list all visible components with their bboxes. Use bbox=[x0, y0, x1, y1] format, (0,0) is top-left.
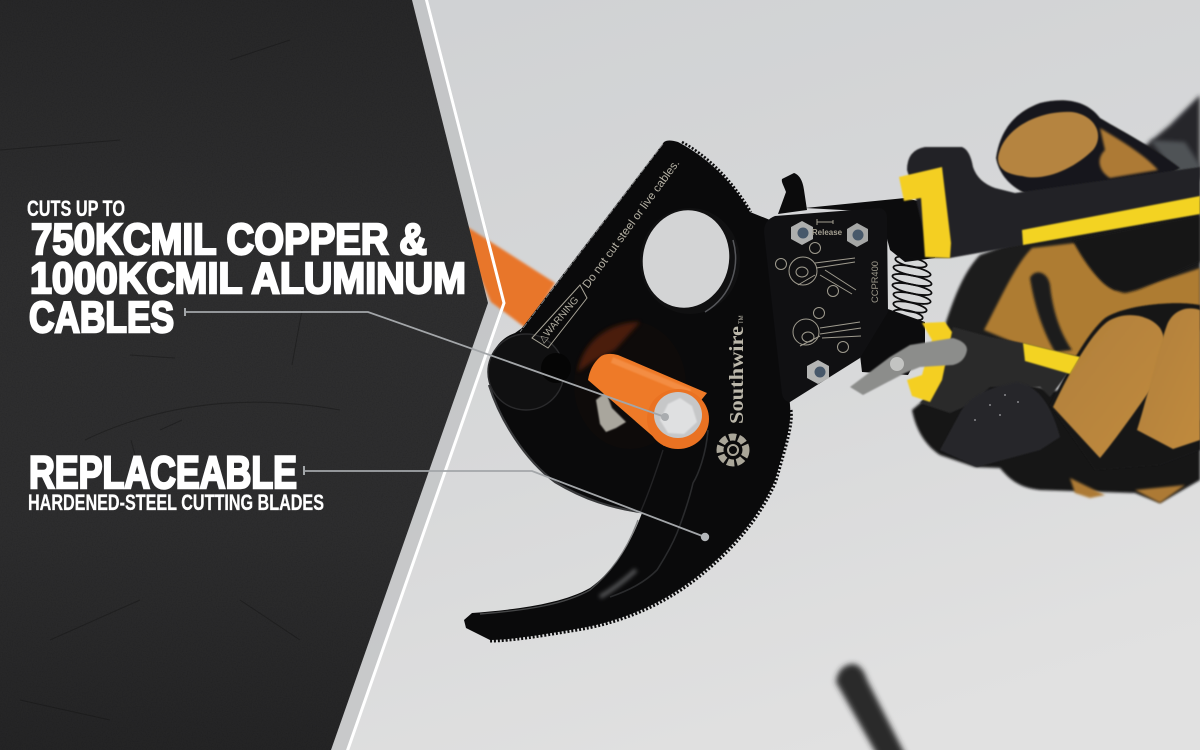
sleeve band bbox=[1150, 140, 1200, 180]
cut debris bbox=[596, 392, 626, 432]
warning box bbox=[532, 285, 587, 348]
warning text: △WARNING bbox=[537, 295, 581, 345]
bolt 2 bbox=[847, 223, 868, 247]
pivot screw bbox=[541, 353, 571, 383]
text block: cutting capacity bbox=[27, 196, 466, 342]
tan finger two bbox=[1137, 308, 1200, 449]
knuckle speckles bbox=[974, 394, 1019, 421]
capacity headline line 1: 750KCMIL COPPER & bbox=[31, 215, 427, 264]
instruction diagrams bbox=[776, 242, 861, 352]
brand logo bbox=[720, 437, 746, 463]
text block: replaceable blades bbox=[28, 447, 324, 515]
trademark: TM bbox=[739, 315, 745, 324]
blade disc tint bbox=[578, 322, 640, 372]
serrated teeth, lower bbox=[490, 410, 791, 641]
panel grain bbox=[0, 0, 488, 750]
palm dark back bbox=[930, 200, 1200, 400]
bolt 1 bbox=[791, 221, 813, 245]
blades subline: HARDENED-STEEL CUTTING BLADES bbox=[28, 490, 324, 515]
panel: dark textured background bbox=[0, 0, 488, 750]
brand name: Southwire bbox=[726, 326, 748, 424]
tan finger one bbox=[1053, 315, 1165, 458]
upper handle bbox=[907, 147, 1200, 258]
upper arm bbox=[805, 198, 935, 262]
cutter body bbox=[464, 140, 790, 640]
lower handle bbox=[920, 327, 1080, 413]
lower tan sliver bbox=[1070, 478, 1185, 503]
lower yellow clip bbox=[907, 322, 952, 402]
panel scratches bbox=[0, 40, 340, 720]
straight edge highlight bbox=[520, 144, 663, 332]
sleeve bbox=[1140, 95, 1200, 180]
pivot disc bbox=[488, 334, 564, 410]
capacity label: CUTS UP TO bbox=[27, 196, 125, 221]
thumb tan base bbox=[1100, 128, 1158, 178]
release label: Release bbox=[812, 228, 843, 237]
white chevron line bbox=[347, 0, 504, 750]
inner blade edge bbox=[640, 450, 663, 513]
hook highlight bbox=[600, 570, 636, 597]
blades headline: REPLACEABLE bbox=[29, 447, 297, 498]
release lever bbox=[850, 338, 967, 395]
spring bbox=[892, 254, 932, 323]
photo: handles and gloved hand bbox=[850, 95, 1200, 503]
strand highlights bbox=[660, 398, 697, 434]
leader line: cable bbox=[185, 308, 669, 421]
serrated teeth, upper bbox=[682, 142, 751, 212]
blurred object at bottom bbox=[836, 664, 908, 750]
capacity headline line 2: 1000KCMIL ALUMINUM bbox=[30, 254, 466, 303]
palm seam bbox=[1030, 272, 1072, 352]
cable cylinder bbox=[588, 354, 707, 446]
thumb outline bbox=[996, 100, 1180, 197]
model number: CCPR400 bbox=[870, 261, 880, 303]
plate bbox=[764, 208, 888, 402]
hook bevel groove bbox=[610, 430, 708, 597]
palm dark pad bbox=[1073, 215, 1200, 293]
cable top sheen bbox=[612, 360, 690, 392]
lower arm bbox=[860, 308, 925, 375]
lever rivet bbox=[890, 357, 904, 371]
orange cable behind cutter bbox=[466, 226, 555, 329]
bolt 3 bbox=[807, 360, 829, 384]
cable hole bbox=[634, 202, 738, 316]
cable end face bbox=[647, 389, 709, 449]
knuckle pad bbox=[940, 382, 1060, 467]
lower dark glove body bbox=[912, 370, 1200, 503]
finger outlines bbox=[1050, 303, 1200, 470]
aluminium strands bbox=[654, 392, 702, 438]
photo: ratchet cable cutter bbox=[464, 140, 935, 641]
ratchet release prong bbox=[778, 173, 807, 214]
capacity headline line 3: CABLES bbox=[29, 293, 174, 342]
warning sentence: Do not cut steel or live cables. bbox=[581, 158, 682, 291]
release arrow bbox=[817, 219, 833, 225]
blade disc behind cable bbox=[574, 321, 686, 449]
translucent strip beside panel bbox=[331, 0, 506, 750]
bevel highlight bbox=[705, 240, 736, 312]
palm tan bbox=[984, 243, 1200, 358]
cable hole bevel bbox=[640, 208, 740, 314]
upper handle yellow stripe bbox=[1022, 196, 1200, 245]
thumb pad bbox=[998, 112, 1098, 177]
leader line: blades bbox=[304, 466, 709, 541]
lower handle yellow stripe bbox=[1023, 343, 1080, 374]
body bevel rim bbox=[489, 385, 640, 512]
upper yellow clip bbox=[899, 167, 951, 258]
hook edge gloss bbox=[480, 520, 638, 614]
